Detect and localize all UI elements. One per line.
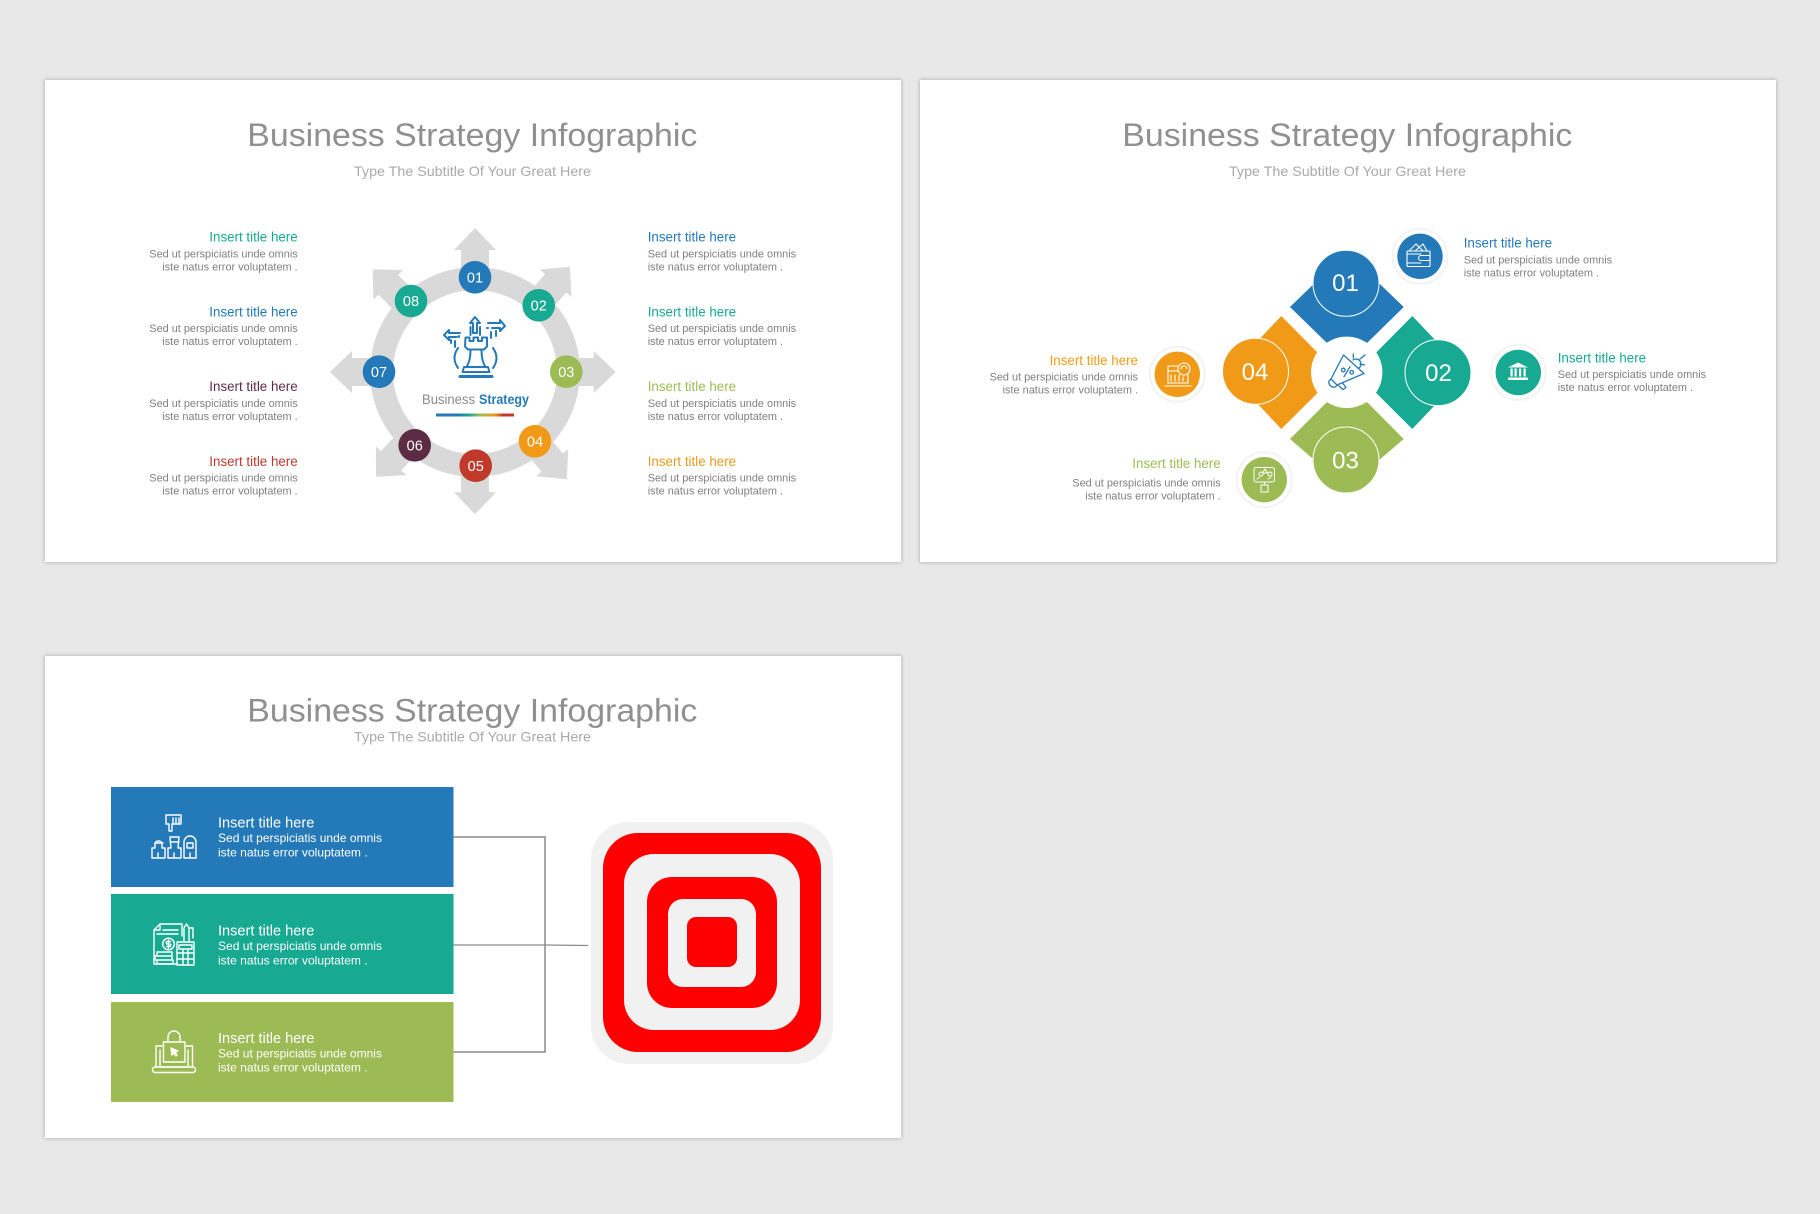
text block 04: Sed ut perspiciatis unde omnis	[990, 372, 1138, 384]
diamond segment 01	[1290, 250, 1404, 343]
green box: iste natus error voluptatem .	[218, 1061, 368, 1075]
blue box: iste natus error voluptatem .	[218, 845, 368, 859]
left text block 3: Insert title here	[209, 379, 298, 394]
left text block 1: Insert title here	[209, 230, 298, 245]
slide 3 subtitle: Type The Subtitle Of Your Great Here	[354, 728, 591, 744]
teal box	[111, 894, 454, 994]
step badge 01	[459, 261, 491, 294]
icon: chess rook with arrows	[444, 317, 505, 376]
step badge 08	[395, 285, 427, 317]
left text block 3	[149, 379, 298, 423]
right text block 4	[648, 454, 797, 498]
green box	[111, 1002, 454, 1102]
small badge: team board	[1237, 452, 1292, 507]
left text block 2: Insert title here	[209, 304, 298, 320]
step badge 06	[398, 429, 431, 462]
slide 3 card	[45, 656, 901, 1138]
panel: slide 1 circular strategy diagram	[45, 80, 901, 562]
right text block 4: Insert title here	[648, 454, 736, 469]
right text block 3: iste natus error voluptatem .	[648, 411, 783, 423]
icon: shopping bag on laptop	[152, 1031, 196, 1072]
step badge 08: 08	[403, 294, 419, 310]
right text block 3: Sed ut perspiciatis unde omnis	[648, 398, 797, 410]
left text block 4: iste natus error voluptatem .	[162, 486, 298, 498]
right text block 1: iste natus error voluptatem .	[648, 262, 783, 274]
text block 03: Insert title here	[1132, 456, 1221, 471]
slide 1 card	[45, 80, 901, 562]
right text block 2: Sed ut perspiciatis unde omnis	[648, 323, 797, 335]
step badge 03: 03	[558, 365, 574, 381]
step badge 03	[550, 355, 583, 388]
small badge: wallet	[1392, 229, 1448, 284]
step badge 02	[522, 289, 555, 322]
diamond segment 04	[1222, 316, 1318, 429]
radial arrows	[330, 228, 616, 514]
left text block 1	[149, 230, 298, 274]
left text block 4: Sed ut perspiciatis unde omnis	[149, 473, 298, 485]
left text block 1: iste natus error voluptatem .	[162, 262, 298, 274]
diamond segment 02	[1376, 316, 1471, 429]
rainbow rule	[436, 414, 514, 416]
right text block 3: Insert title here	[648, 379, 736, 394]
text block 02: Sed ut perspiciatis unde omnis	[1558, 369, 1707, 381]
center label: Business	[422, 392, 475, 407]
step badge 04: 04	[527, 434, 543, 450]
slide 2 subtitle: Type The Subtitle Of Your Great Here	[1229, 163, 1466, 179]
text block 04	[990, 353, 1138, 396]
icon: documents and calculator	[154, 924, 194, 965]
text block 01: Sed ut perspiciatis unde omnis	[1464, 254, 1613, 266]
text block 03: Sed ut perspiciatis unde omnis	[1072, 478, 1221, 490]
blue box: Insert title here	[218, 815, 314, 831]
left text block 2: Sed ut perspiciatis unde omnis	[149, 323, 298, 335]
left text block 3: Sed ut perspiciatis unde omnis	[149, 398, 298, 410]
slide 2 card	[920, 80, 1776, 562]
green box: Insert title here	[218, 1031, 314, 1047]
blue box	[111, 787, 454, 887]
teal box: Sed ut perspiciatis unde omnis	[218, 939, 382, 953]
text block 02	[1558, 350, 1707, 394]
diamond segment 03: 03	[1332, 448, 1359, 474]
step badge 01: 01	[467, 270, 483, 286]
step badge 07	[363, 355, 395, 388]
right text block 2: Insert title here	[648, 304, 736, 320]
right text block 1: Sed ut perspiciatis unde omnis	[648, 248, 797, 260]
diamond segment 01: 01	[1332, 270, 1359, 297]
slide 2 heading: Business Strategy Infographic	[1122, 117, 1572, 153]
right text block 3	[648, 379, 797, 423]
text block 01	[1464, 236, 1613, 279]
right text block 2: iste natus error voluptatem .	[648, 336, 783, 348]
slide 3 heading: Business Strategy Infographic	[247, 693, 697, 729]
panel: slide 2 diamond diagram	[920, 80, 1776, 562]
step badge 06: 06	[407, 438, 423, 454]
slide 1 heading: Business Strategy Infographic	[247, 117, 697, 153]
text block 03: iste natus error voluptatem .	[1085, 490, 1221, 502]
text block 03	[1072, 456, 1221, 502]
teal box: iste natus error voluptatem .	[218, 953, 368, 967]
grey ring	[382, 278, 568, 466]
connector lines	[453, 837, 588, 1052]
step badge 05	[459, 449, 492, 482]
slide 1 subtitle: Type The Subtitle Of Your Great Here	[354, 163, 591, 179]
text block 02: iste natus error voluptatem .	[1558, 382, 1693, 394]
center label emphasis: Strategy	[479, 392, 529, 407]
left text block 1: Sed ut perspiciatis unde omnis	[149, 248, 298, 260]
left text block 4: Insert title here	[209, 454, 298, 469]
step badge 02: 02	[531, 298, 547, 314]
left text block 2	[149, 304, 298, 348]
left text block 3: iste natus error voluptatem .	[162, 411, 298, 423]
step badge 04	[519, 425, 551, 458]
text block 01: iste natus error voluptatem .	[1464, 267, 1599, 279]
small badge: chart board	[1150, 347, 1205, 402]
green box: Sed ut perspiciatis unde omnis	[218, 1046, 382, 1060]
center white circle	[1311, 337, 1382, 408]
step badge 07: 07	[371, 365, 387, 381]
blue box: Sed ut perspiciatis unde omnis	[218, 831, 382, 845]
left text block 4	[149, 454, 298, 498]
icon: roller and figures	[152, 815, 196, 858]
text block 01: Insert title here	[1464, 236, 1552, 251]
teal box: Insert title here	[218, 923, 314, 939]
left text block 2: iste natus error voluptatem .	[162, 336, 298, 348]
icon: megaphone	[1329, 354, 1365, 390]
step badge 05: 05	[468, 459, 484, 475]
right text block 4: Sed ut perspiciatis unde omnis	[648, 473, 797, 485]
text block 04: iste natus error voluptatem .	[1003, 384, 1138, 396]
text block 02: Insert title here	[1558, 350, 1646, 366]
text block 04: Insert title here	[1050, 353, 1138, 368]
right text block 2	[648, 304, 797, 348]
right text block 1: Insert title here	[648, 230, 736, 245]
diamond segment 04: 04	[1242, 359, 1268, 386]
right text block 4: iste natus error voluptatem .	[648, 486, 783, 498]
right text block 1	[648, 230, 797, 274]
icon: red target	[591, 822, 833, 1064]
diamond segment 03	[1290, 402, 1404, 493]
panel: slide 3 target diagram	[45, 656, 901, 1138]
diamond segment 02: 02	[1425, 360, 1452, 387]
small badge: bank	[1491, 345, 1546, 400]
